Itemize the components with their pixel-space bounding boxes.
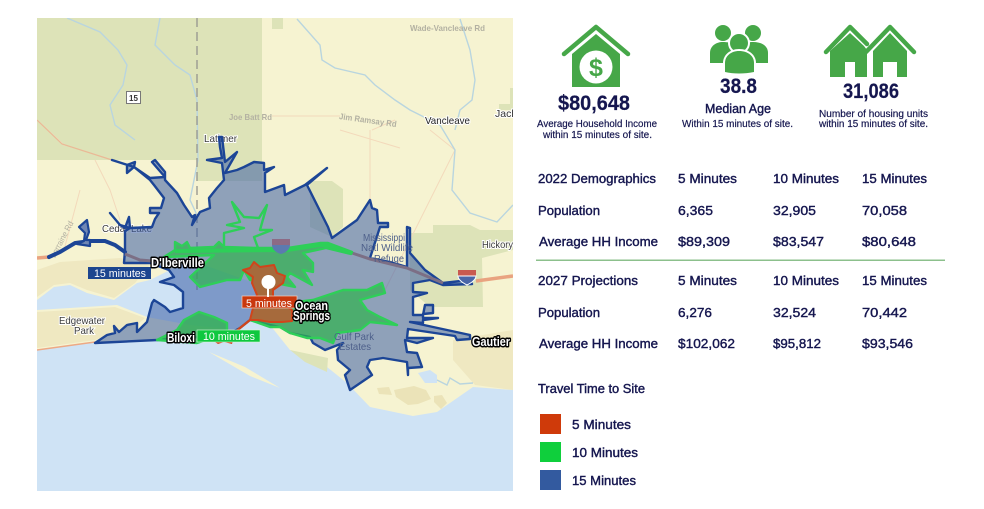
legend: Travel Time to Site <box>538 381 645 396</box>
table: 2022 demographics: 6,365 <box>678 203 713 218</box>
legend: 15 Minutes <box>572 473 637 488</box>
stat: average household income: Average Household Income <box>537 118 657 130</box>
legend <box>538 381 645 490</box>
road labels: Lorraine Rd <box>48 219 76 259</box>
15 minute travel area <box>49 137 472 390</box>
table: 2027 projections: $93,546 <box>862 336 913 351</box>
table: 2022 demographics: Average HH Income <box>539 234 658 249</box>
table: 2027 projections: Population <box>538 305 600 320</box>
road labels: Jim Ramsay Rd <box>338 111 397 129</box>
place labels: Jack <box>495 108 517 120</box>
stat: average household income: $80,648 <box>558 92 630 115</box>
5 minute travel area <box>212 262 292 344</box>
table: 2022 demographics: 10 Minutes <box>773 171 840 186</box>
stat: housing units: within 15 minutes of site. <box>818 119 928 130</box>
table: 2022 demographics: Population <box>538 203 600 218</box>
table: 2027 projections: 10 Minutes <box>773 273 840 288</box>
site pin <box>262 275 276 297</box>
table: 2027 projections: 70,442 <box>862 305 907 320</box>
faint labels over area: Gulf Park <box>334 331 375 343</box>
table: 2022 demographics: 70,058 <box>862 203 907 218</box>
table: 2027 projections: 6,276 <box>678 305 712 320</box>
faint labels over area: Estates <box>339 341 371 353</box>
stat: median age: Within 15 minutes of site. <box>682 118 793 130</box>
table: 2022 demographics: 32,905 <box>773 203 816 218</box>
faint labels over area: Natl Wildlife <box>361 242 413 254</box>
10 minute travel area <box>157 202 397 343</box>
table: 2027 projections: 32,524 <box>773 305 816 320</box>
faint labels over area: Mississippi <box>363 232 405 244</box>
label: 5 minutes: 5 minutes <box>246 298 292 310</box>
label: 10 minutes: 10 minutes <box>203 331 255 343</box>
table: 2022 demographics: $89,309 <box>678 234 730 249</box>
label: 15 minutes: 15 minutes <box>94 268 146 280</box>
county line <box>196 18 198 290</box>
table: 2027 projections: Average HH Income <box>539 336 658 351</box>
stat: median age: Median Age <box>705 101 771 116</box>
stat: median age: 38.8 <box>720 75 757 98</box>
I-10 shield <box>272 239 290 254</box>
icon: people <box>710 25 768 74</box>
table: 2027 projections: 15 Minutes <box>862 273 928 288</box>
city labels: Gautier <box>472 335 510 349</box>
table: 2027 projections <box>538 273 928 351</box>
highway 15 shield: 15 <box>129 94 138 103</box>
stat: housing units: Number of housing units <box>819 109 928 120</box>
city labels: D'Iberville <box>151 256 204 270</box>
place labels: Cedar Lake <box>102 223 152 235</box>
faint labels over area: Refuge <box>374 253 404 265</box>
city labels: Springs <box>293 309 330 323</box>
table: 2022 demographics: $83,547 <box>773 234 824 249</box>
place labels: Edgewater <box>59 315 105 327</box>
table: 2027 projections: 2027 Projections <box>538 273 639 288</box>
table: 2022 demographics: 15 Minutes <box>862 171 928 186</box>
stat: average household income: within 15 minutes of site. <box>542 129 652 141</box>
road labels: Wade-Vancleave Rd <box>410 23 485 33</box>
table: 2027 projections: 5 Minutes <box>678 273 738 288</box>
place labels: Hickory <box>482 239 514 251</box>
map <box>37 18 517 491</box>
table: 2022 demographics: 2022 Demographics <box>538 171 656 186</box>
table: 2027 projections: $102,062 <box>678 336 735 351</box>
table: 2027 projections: $95,812 <box>773 336 821 351</box>
highway 15 shield <box>126 92 140 104</box>
stat: housing units: 31,086 <box>843 80 899 103</box>
I-10 shield east <box>458 270 476 285</box>
place labels <box>59 108 517 337</box>
icon: house with dollar sign: $ <box>589 54 603 82</box>
west highway tail <box>49 241 125 257</box>
stat: average household income <box>537 27 657 141</box>
city labels: Ocean <box>295 299 328 313</box>
city labels: Biloxi <box>167 331 195 345</box>
place labels: Vancleave <box>425 115 470 127</box>
table: 2022 demographics <box>538 171 928 249</box>
road labels <box>48 23 485 259</box>
highway through area <box>125 253 443 283</box>
legend: 10 Minutes <box>572 445 639 460</box>
icon: two houses <box>826 27 914 77</box>
place labels: Latimer <box>204 133 237 145</box>
stat: housing units <box>818 27 928 130</box>
road labels: Joe Batt Rd <box>229 112 272 122</box>
stat: median age <box>682 25 793 130</box>
table: 2022 demographics: 5 Minutes <box>678 171 738 186</box>
city labels <box>151 256 510 349</box>
table: 2022 demographics: $80,648 <box>862 234 916 249</box>
faint labels over area <box>334 232 413 353</box>
legend: 5 Minutes <box>572 417 632 432</box>
place labels: Park <box>74 325 95 337</box>
